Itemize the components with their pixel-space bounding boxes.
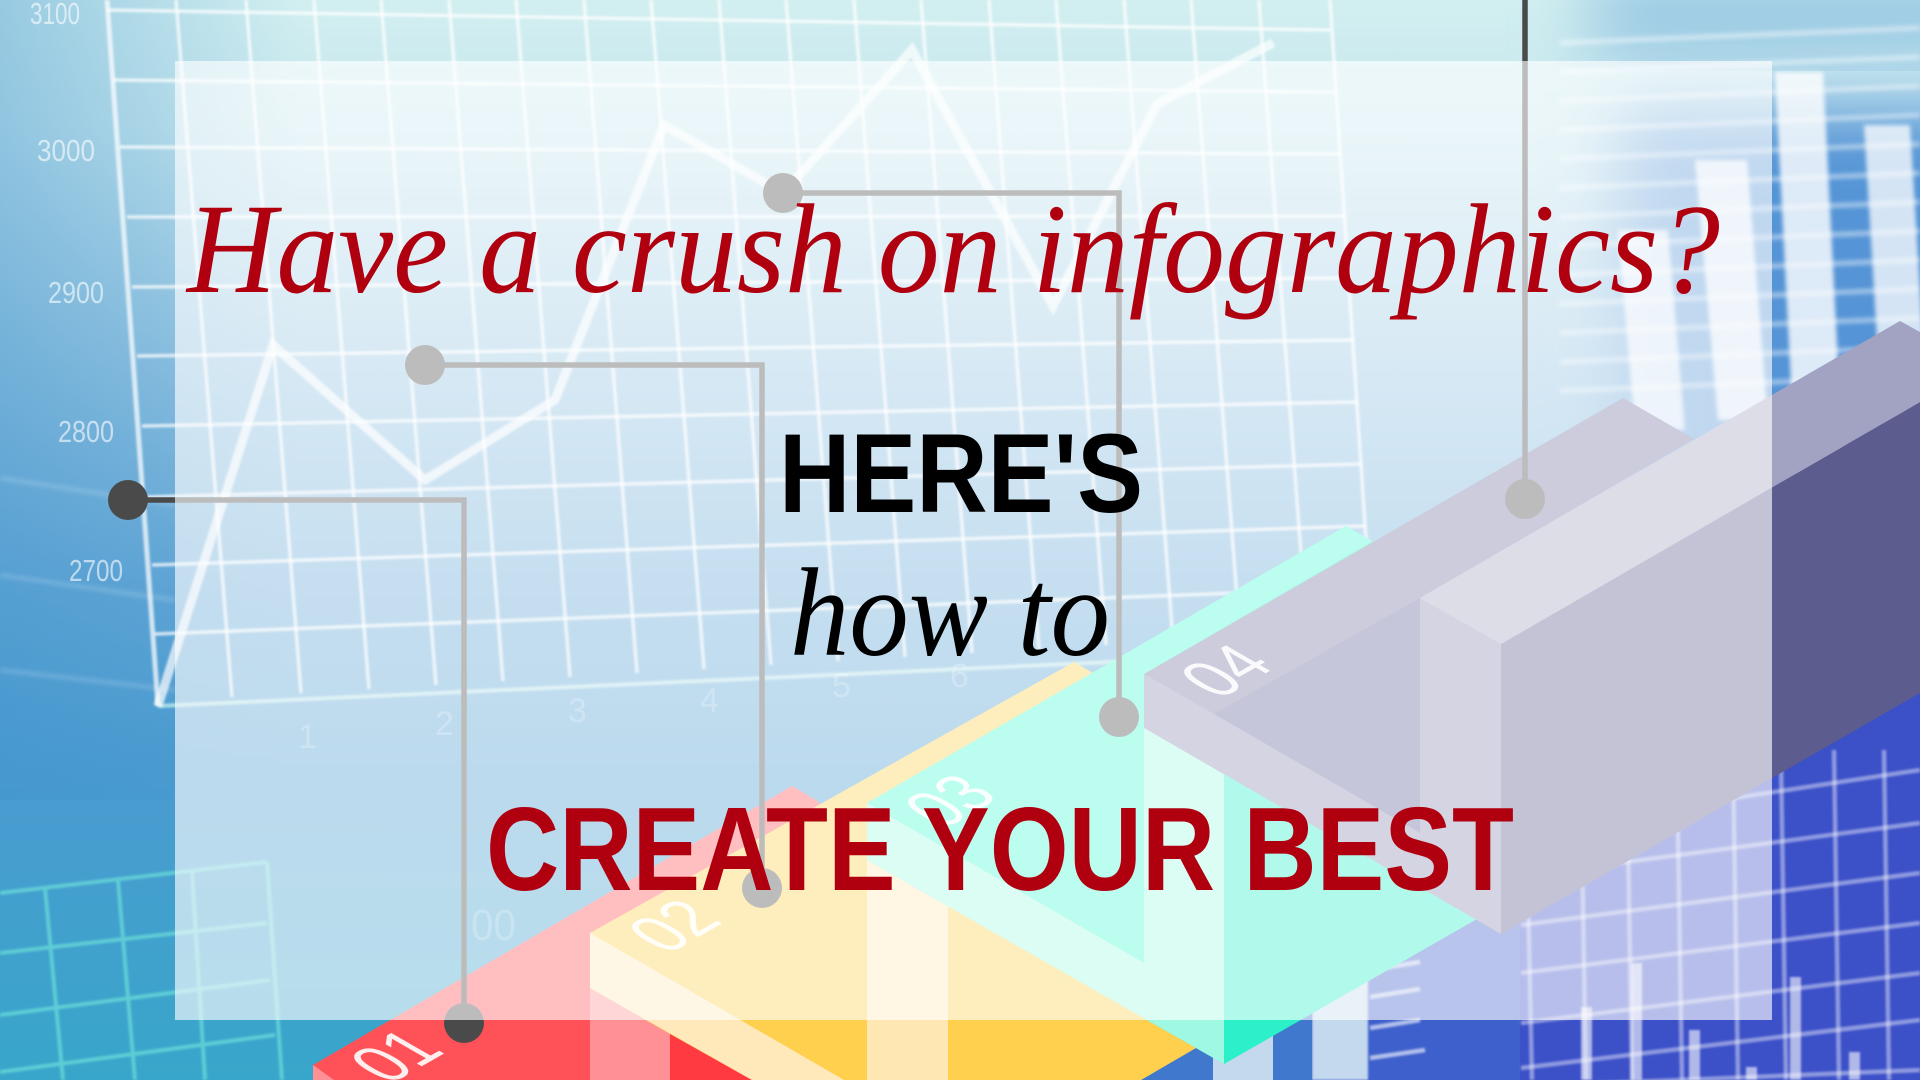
isometric bar: step 03 <box>867 526 1477 1064</box>
connector 4 <box>1505 0 1545 519</box>
chart axis labels: 3 <box>568 692 587 730</box>
chart axis labels: 6 <box>950 657 969 695</box>
subheading: how to: how to <box>790 544 1110 683</box>
heading: here's: HERE'S <box>779 411 1143 536</box>
chart axis labels: 4 <box>700 682 719 720</box>
chart axis labels: 3000 <box>37 133 95 168</box>
bottom left grid <box>0 862 282 1080</box>
title: Have a crush on infographics? <box>185 178 1720 320</box>
chart axis labels: 2 <box>435 705 454 743</box>
connector 2 <box>405 345 782 908</box>
connector 3 <box>763 173 1139 737</box>
heading: create your best: CREATE YOUR BEST <box>486 783 1514 916</box>
isometric bar: step 02 <box>590 662 1200 1080</box>
step numbers: 04 <box>1162 634 1291 708</box>
streaks on left background <box>0 478 175 690</box>
step numbers: 02 <box>610 889 739 963</box>
chart axis labels: 5 <box>832 667 851 705</box>
isometric bar: step 01 <box>313 786 819 1080</box>
chart axis labels: 1 <box>298 718 317 756</box>
faint chart number: 00 <box>471 901 516 950</box>
line chart grid <box>107 0 1372 706</box>
translucent white panel <box>175 61 1772 1020</box>
chart axis labels: 2900 <box>48 275 104 310</box>
chart axis labels: 2700 <box>69 553 123 588</box>
chart axis labels: 2800 <box>58 414 114 449</box>
isometric bar: step 04 <box>1144 321 1920 934</box>
bar chart top right <box>1560 28 1920 500</box>
line chart data line <box>158 43 1273 706</box>
connector 1 <box>108 480 484 1043</box>
bar chart bottom right <box>1370 750 1920 1080</box>
step numbers: 03 <box>886 764 1015 838</box>
step numbers <box>332 634 1291 1080</box>
chart axis labels <box>30 0 969 756</box>
